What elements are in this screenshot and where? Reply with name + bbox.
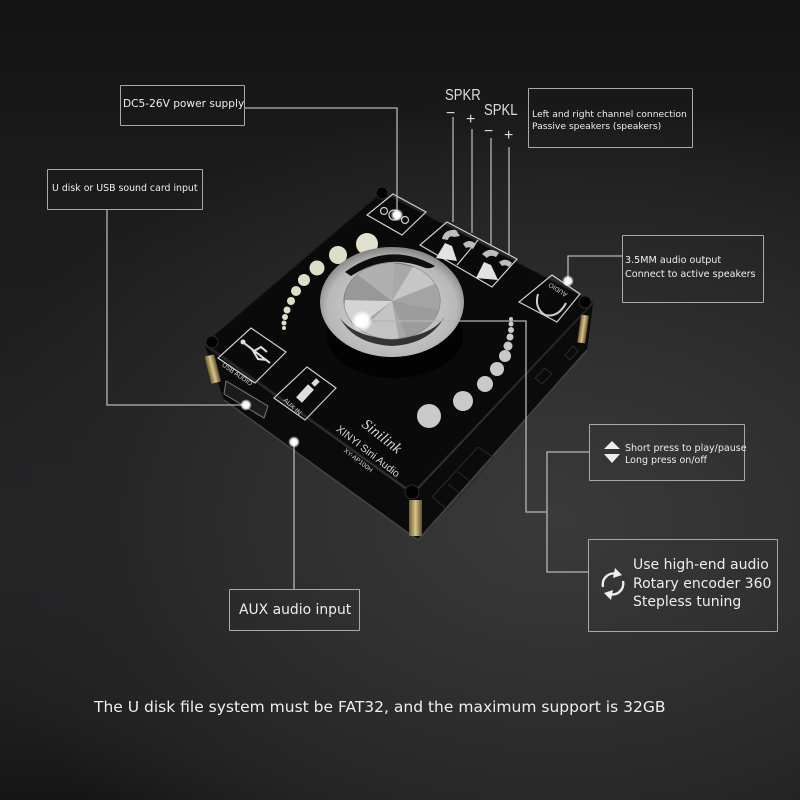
label: speaker channels — [528, 88, 693, 148]
usb marking — [218, 328, 286, 383]
polarity marks: + — [504, 127, 513, 144]
led dots right arc — [417, 317, 514, 428]
power terminal marking — [367, 194, 426, 235]
press text: Long press on/off — [625, 455, 707, 466]
rotary text: Stepless tuning — [633, 594, 741, 610]
heading: SPKR: SPKR — [445, 87, 481, 104]
volume knob — [320, 247, 464, 378]
silkscreen text: USB AUDIO — [220, 362, 253, 388]
polarity marks — [446, 105, 513, 144]
label: AUX input: AUX audio input — [239, 602, 351, 618]
board edge and lower PCB — [205, 304, 593, 540]
label: power supply — [120, 85, 245, 126]
label: AUX input — [229, 589, 360, 631]
silkscreen text: XINYI Sini Audio — [334, 423, 402, 480]
connector lines — [107, 108, 622, 589]
polarity marks: + — [466, 111, 475, 128]
press text — [625, 443, 747, 466]
rotary text: Rotary encoder 360 — [633, 576, 771, 592]
corner screws — [206, 187, 591, 499]
silkscreen text — [220, 281, 569, 480]
label: press function — [589, 424, 745, 481]
heading: SPKL: SPKL — [484, 102, 518, 119]
circuit board — [205, 187, 593, 540]
polarity marks: − — [446, 105, 455, 122]
label: 3.5mm output: Connect to active speakers — [625, 268, 756, 280]
label: speaker channels: Passive speakers (speakers) — [532, 121, 661, 132]
label: rotary function — [588, 539, 778, 632]
label: USB input — [47, 169, 203, 210]
connector end dots — [240, 209, 574, 448]
label: 3.5mm output — [622, 235, 764, 303]
usb port — [224, 381, 268, 418]
led dots left arc — [282, 233, 378, 330]
rotary text: Use high-end audio — [633, 557, 769, 573]
silkscreen text: AUDIO — [548, 281, 569, 298]
label: power supply: DC5-26V power supply — [123, 98, 244, 110]
label: USB input: U disk or USB sound card input — [52, 183, 198, 194]
label: speaker channels: Left and right channel connection — [532, 109, 687, 120]
polarity marks: − — [484, 123, 493, 140]
product board illustration with connector lines — [106, 107, 622, 589]
silkscreen text: XY-AP100H — [342, 447, 374, 474]
audio out marking — [519, 275, 580, 322]
board top face — [205, 192, 593, 492]
footnote: The U disk file system must be FAT32, and the maximum support is 32GB — [94, 698, 665, 716]
brass standoffs — [205, 315, 589, 536]
rotary text — [633, 557, 771, 610]
icon: rotate arrows — [602, 568, 624, 600]
icon: up and down triangles — [604, 441, 620, 463]
speaker terminal markings — [420, 222, 517, 287]
silkscreen text: Sinilink — [358, 416, 405, 457]
label: 3.5mm output: 3.5MM audio output — [625, 255, 721, 266]
press text: Short press to play/pause — [625, 443, 747, 454]
aux in marking — [274, 367, 336, 420]
silkscreen text: AUX IN — [282, 397, 303, 417]
